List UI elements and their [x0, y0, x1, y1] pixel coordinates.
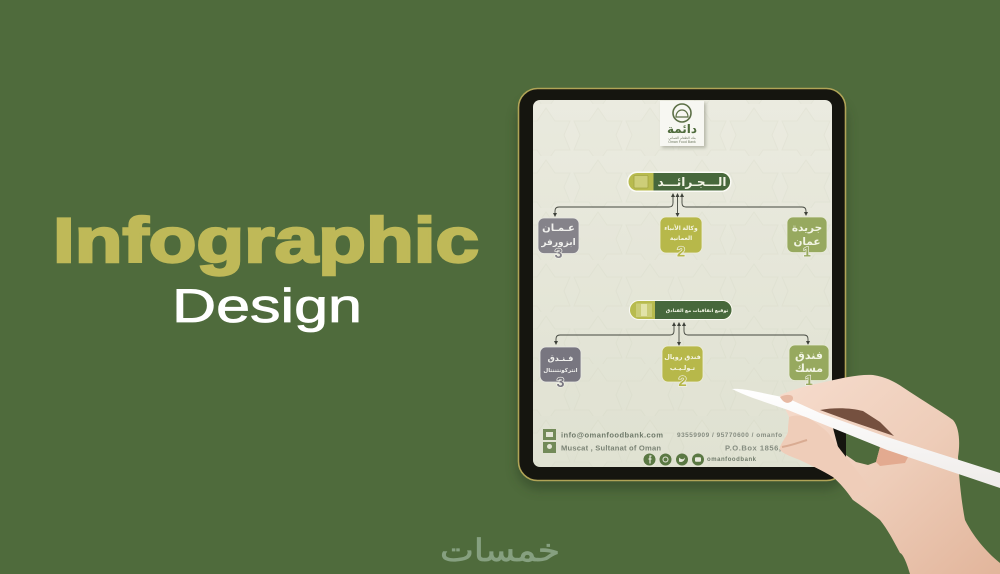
card: Oman News Agency: 2: [677, 244, 685, 260]
logo mark: [673, 104, 691, 122]
card: Royal Tulip hotel: 2: [678, 373, 687, 390]
social icons: [644, 454, 704, 466]
thumb over pencil: [780, 416, 872, 500]
card: Oman newspaper: جريدة: [792, 222, 822, 234]
fingernail: [780, 395, 793, 403]
logo name: دائمة: [667, 122, 697, 136]
hand holding pencil: [732, 375, 1000, 574]
card: InterContinental hotel: فـنـدق: [548, 354, 573, 363]
card: Royal Tulip hotel: فندق رويال: [664, 354, 701, 361]
finger crease: [782, 440, 807, 447]
connectors: hotels: [556, 324, 808, 344]
logo card: [660, 101, 706, 148]
card: Oman Observer: ابزورفر: [540, 237, 576, 248]
logo caption: بنك الطعام العماني: [668, 136, 696, 141]
connectors: newspapers: [555, 195, 806, 215]
tablet screen: [533, 100, 832, 467]
card: Royal Tulip hotel: [662, 346, 703, 390]
card: InterContinental hotel: 3: [557, 374, 565, 390]
icon: location: [543, 442, 556, 453]
shadow under index finger: [820, 408, 894, 436]
icon: email: [543, 429, 556, 440]
tablet body: [518, 88, 846, 480]
watermark: Khamsat: خمسات: [440, 533, 560, 568]
email address: info@omanfoodbank.com: [561, 430, 663, 440]
icon: newspaper: [634, 176, 648, 188]
card: Oman Observer: 3: [555, 245, 563, 261]
logo caption latin: Oman Food Bank: [668, 140, 696, 144]
tablet shadow: [516, 98, 848, 490]
card: Musk hotel: فندق: [795, 350, 823, 362]
social handle: omanfoodbank: [707, 457, 757, 463]
card: Oman Observer: [538, 218, 579, 261]
header pill: newspapers: [627, 172, 732, 192]
card: Royal Tulip hotel: تـولـيـب: [670, 365, 695, 372]
card: Oman newspaper: [787, 217, 827, 260]
card: Oman newspaper: 1: [803, 244, 811, 260]
card: Oman newspaper: عمان: [793, 236, 821, 248]
card: Musk hotel: مسك: [795, 363, 823, 375]
pencil: [732, 389, 1000, 488]
title: [53, 206, 479, 332]
card: InterContinental hotel: انتركونتننتال: [543, 367, 578, 374]
header pill: hotel agreements: [629, 300, 732, 320]
PO box: P.O.Box 1856,: [725, 444, 781, 452]
footer contact: [543, 429, 782, 466]
phone numbers: 93559909 / 95770600 / omanfo: [677, 432, 782, 439]
gap between fingers: tablet bezel: [833, 428, 846, 458]
tablet: [516, 88, 848, 490]
card: Oman Observer: عـمـان: [542, 223, 575, 234]
heading: Infographic: Infographic: [53, 206, 479, 276]
card: Oman News Agency: العمانية: [670, 235, 692, 242]
card: Oman News Agency: وكالة الأنباء: [664, 224, 698, 232]
card: InterContinental hotel: [540, 347, 581, 390]
card: Musk hotel: 1: [805, 372, 813, 388]
lower finger shade: [876, 447, 908, 466]
icon: hotel building: [636, 304, 652, 317]
pill label: الـــجـرائـــد: [658, 175, 726, 189]
card: Oman News Agency: [660, 217, 702, 260]
heading: Design: Design: [172, 279, 362, 332]
pill label: توقيع اتفاقيات مع الفنادق: [666, 308, 728, 314]
gap between fingers: background: [846, 433, 880, 465]
card: Musk hotel: [789, 345, 829, 388]
hand: [780, 375, 1000, 574]
address: Muscat , Sultanat of Oman: [561, 444, 661, 452]
